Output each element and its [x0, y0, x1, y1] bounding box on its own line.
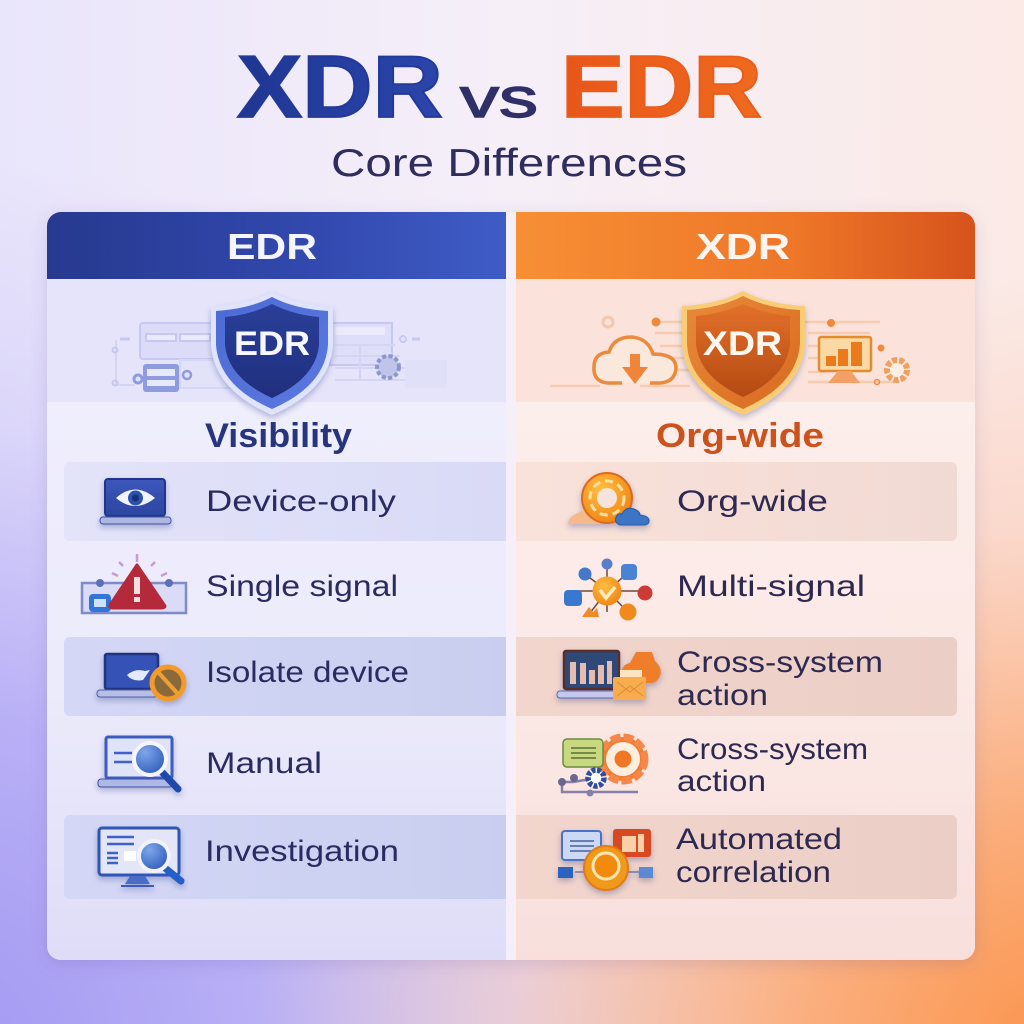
shield: EDR	[211, 292, 333, 415]
icon: laptop with eye	[100, 479, 171, 524]
text: Automated correlation: Automated	[676, 823, 842, 856]
EDR hero illustration	[112, 292, 447, 415]
row: Cross-system action (2)	[558, 733, 868, 798]
row: Manual: Manual	[206, 747, 322, 780]
icon: dashboard laptop with envelope	[557, 651, 661, 700]
subheading: Org-wide: Org-wide	[656, 417, 824, 455]
icon: correlation hub	[558, 829, 653, 890]
panel: XDR column	[516, 212, 975, 960]
icon: alert triangle	[82, 554, 186, 613]
row: Multi-signal: Multi-signal	[677, 570, 865, 603]
text: Cross-system action: action	[677, 679, 768, 712]
text: Cross-system action: action	[677, 765, 766, 798]
subheading: Visibility: Visibility	[205, 417, 352, 455]
row: Org-wide: Org-wide	[677, 485, 828, 518]
text: Cross-system action	[677, 646, 883, 712]
faint network backdrop	[112, 323, 447, 388]
row: Device-only	[64, 462, 506, 541]
shield: XDR	[682, 291, 805, 415]
XDR hero illustration	[550, 291, 907, 415]
icon: cloud with download arrow	[594, 337, 676, 384]
faint connector lines	[550, 322, 900, 386]
shield: XDR: XDR	[703, 325, 782, 363]
title: XDR vs EDR: vs	[460, 66, 538, 129]
text: Cross-system action: Cross-system	[677, 646, 883, 679]
title: XDR vs EDR: XDR	[237, 37, 443, 136]
row: Isolate device: Isolate device	[206, 656, 409, 689]
icon: signal hub	[564, 558, 652, 620]
icon: laptop with magnifier	[98, 737, 178, 789]
row: Single signal	[82, 554, 398, 613]
small server icon	[134, 364, 191, 392]
panel: EDR column	[47, 212, 506, 960]
subtitle: Core Differences	[331, 142, 687, 185]
faint gear	[377, 356, 399, 378]
row: Isolate device	[64, 637, 506, 716]
accent dots	[603, 317, 884, 384]
title: XDR vs EDR: EDR	[561, 37, 762, 136]
row: Multi-signal	[564, 558, 865, 620]
comparison card	[47, 212, 975, 960]
row: Device-only: Device-only	[206, 485, 396, 518]
icon: blocked laptop	[97, 654, 184, 699]
text: Cross-system action: Cross-system	[677, 733, 868, 766]
EDR hero band	[47, 279, 506, 402]
small gear	[887, 360, 907, 380]
shield: EDR: EDR	[234, 325, 310, 363]
row: Single signal: Single signal	[206, 570, 398, 603]
XDR column header: XDR	[696, 226, 790, 267]
icon: monitor with magnifier	[99, 828, 181, 887]
icon: gears with message card	[558, 737, 645, 796]
text: Cross-system action	[677, 733, 868, 798]
text: Automated correlation	[676, 823, 842, 889]
EDR column header: EDR	[227, 226, 317, 267]
XDR column header	[516, 212, 975, 279]
icon: monitor with bars	[819, 337, 871, 383]
row: Automated correlation	[516, 815, 957, 899]
row: Org-wide	[516, 462, 957, 541]
row: Investigation: Investigation	[205, 835, 399, 868]
row: Cross-system action (1)	[516, 637, 957, 716]
text: Automated correlation: correlation	[676, 856, 831, 889]
row: Investigation	[64, 815, 506, 899]
row: Manual	[98, 737, 322, 789]
XDR hero band	[516, 279, 975, 402]
EDR column header	[47, 212, 506, 279]
icon: dial with cloud	[568, 473, 649, 525]
title: XDR vs EDR	[237, 37, 762, 136]
